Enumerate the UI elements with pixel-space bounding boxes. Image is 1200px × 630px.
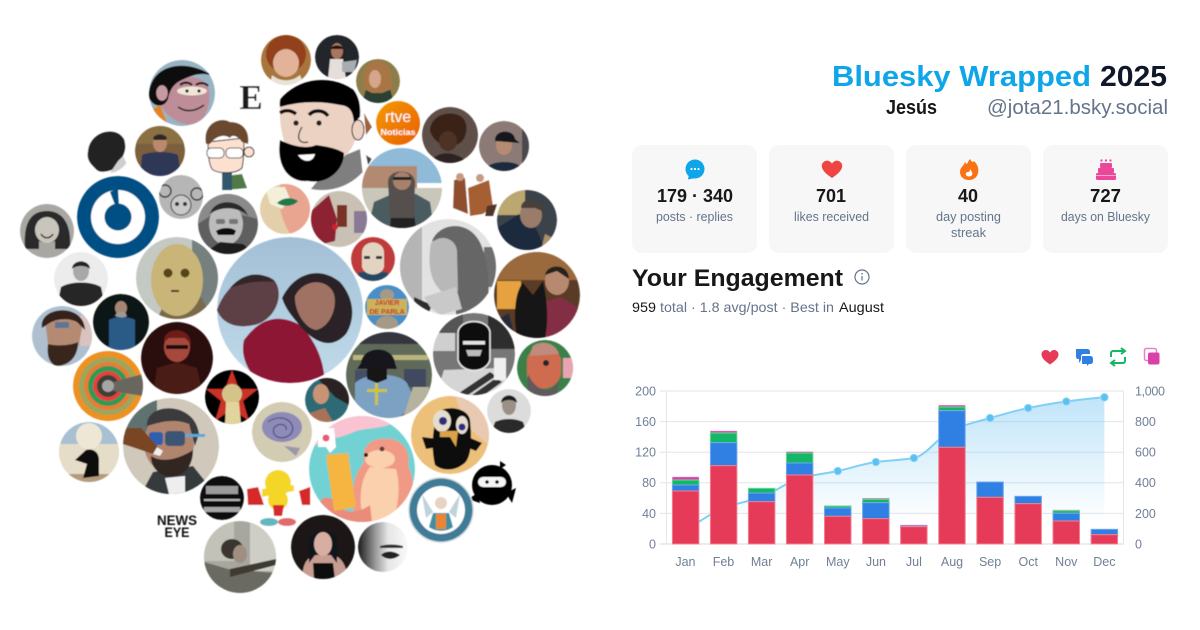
panel: likes received: 701 [816,186,846,206]
avatar: man with beer bottle [123,398,219,494]
engagement summary: August [839,299,884,315]
right axis labels: 0 [1135,538,1142,552]
avatar: news eye logo: NEWS [157,512,197,528]
panel: days on Bluesky: days on Bluesky [1061,210,1151,224]
month labels [675,555,1116,569]
avatar: dark hair profile [86,130,126,173]
left axis labels: 0 [649,538,656,552]
engagement summary: 959 [632,299,656,315]
panel: posts and replies: posts · replies [656,210,733,224]
avatar: eye closeup black and white [358,522,408,572]
month labels: Apr [790,555,809,569]
avatar: taj mahal photo [59,422,119,484]
avatar: ram drawing [159,175,203,219]
panel: day posting streak: 40 [958,186,978,206]
month labels: Dec [1093,555,1116,569]
month labels: Oct [1018,555,1038,569]
avatar: cartoon bearded man [267,79,377,190]
bar: November [1053,510,1080,544]
right axis labels: 200 [1135,507,1156,521]
month labels: May [826,555,850,569]
cumulative line [685,394,1108,530]
month labels: Aug [941,555,963,569]
right axis labels [1135,384,1165,552]
avatar: man with cat [494,252,580,338]
icon: reposts legend [1111,348,1125,366]
icon: birthday cake [1096,160,1116,180]
avatar: scribble plate [252,402,312,462]
avatar: otter with phone [309,416,415,522]
engagement summary [632,299,884,315]
avatar: tweety with boxing gloves [246,465,310,529]
avatar: blue ring logo [77,176,159,258]
avatar: man with cap [479,121,529,171]
avatar: curly hair smile drawing [20,204,74,258]
handle: @jota21.bsky.social [987,97,1168,119]
avatar: javier de parla logo [365,285,409,332]
avatar: rembrandt portrait [422,107,478,163]
avatar: woman with guitar [204,521,276,593]
bar: October [1015,496,1041,544]
avatar: man in black sweater [54,252,108,306]
avatar: woman with laptop [315,35,359,79]
icon: chat bubble [686,160,704,180]
panel: day posting streak [906,145,1031,253]
bar: August [939,405,965,544]
panel: days on Bluesky: 727 [1090,186,1121,206]
avatar: main profile photo [217,237,363,383]
engagement summary: total · 1.8 avg/post · Best in [660,299,834,315]
avatar: man looking down [497,190,557,250]
avatar: cartoon man with black hair [149,60,215,126]
avatar: E logo: E [239,78,263,117]
avatar: hand with red nail [311,191,367,247]
avatar: woman drawing with gun [305,378,349,422]
grid lines [660,391,1124,544]
bar: July [901,525,927,544]
left axis labels: 120 [635,446,656,460]
title: 2025 [1100,61,1167,93]
bar: February [710,431,737,544]
bar: June [863,498,889,544]
icon: quotes legend [1144,348,1160,364]
avatar: long hair man [356,59,400,103]
avatar: eye closeup [260,184,310,234]
panel: day posting streak: streak [951,226,987,240]
month labels: Nov [1055,555,1078,569]
panel: day posting streak: day posting [936,210,1001,224]
left axis labels: 160 [635,415,656,429]
panel: likes received: likes received [794,210,869,224]
panel: days on Bluesky [1043,145,1168,253]
avatar: drawn bald man [351,237,395,281]
chart legend [1042,348,1160,366]
avatar: ninja [468,461,516,505]
avatar: man in red light [141,322,213,394]
month labels: Mar [751,555,772,569]
panel: posts and replies: 179 · 340 [657,186,733,206]
bar: March [748,488,775,544]
right axis labels: 800 [1135,415,1156,429]
avatar: cartoon crow [411,396,489,474]
avatar: woman black and white [400,219,496,315]
avatar: engraving of bearded man [433,313,515,395]
avatar: blue medal logo [408,477,474,543]
avatar: news eye logo: EYE [164,524,190,540]
icon: flame [960,159,978,180]
avatar: fist on red star [205,370,259,424]
icon: info [855,270,869,284]
avatar cluster [20,35,580,593]
month labels: Feb [713,555,734,569]
avatar: groucho [198,194,258,254]
left axis labels [635,384,656,552]
avatar: rtve noticias logo [376,101,420,145]
chart: monthly engagement [635,384,1165,569]
icon: likes legend [1042,350,1058,364]
avatar: man in suit [487,389,531,433]
icon: replies legend [1076,349,1093,366]
bar: September [977,482,1003,544]
avatar: cartoon man with glasses [192,118,264,190]
month labels: Jun [866,555,886,569]
bar: May [824,506,851,544]
left axis labels: 40 [642,507,656,521]
heading: your engagement: Your Engagement [632,265,843,292]
avatar: concentric rings artwork [73,351,143,421]
title: Bluesky Wrapped [832,61,1091,93]
right axis labels: 1,000 [1135,384,1165,398]
avatar: javier de parla logo: DE PARLA [369,309,405,316]
month labels: Jan [675,555,696,569]
left axis labels: 200 [635,384,656,398]
avatar: man in blue shirt outdoors [135,126,185,176]
right axis labels: 600 [1135,446,1156,460]
avatar: rtve noticias logo: rtve [385,109,411,126]
avatar: goth girl [291,515,355,579]
avatar: bearded man with forehead label [32,306,92,366]
bar: April [786,452,813,544]
avatar: news eye logo [157,512,197,540]
bar: January [672,477,699,544]
avatar: child photo [261,35,311,85]
panel: likes received [769,145,894,253]
avatar: potato head [136,237,218,319]
avatar: rtve noticias logo: Noticias [380,127,416,137]
month labels: Jul [906,555,922,569]
avatar: E logo [230,75,272,117]
avatar: costume group [446,165,500,219]
month labels: Sep [979,555,1001,569]
cumulative area [685,397,1104,544]
avatar: seated man in blue shirt [93,294,149,350]
icon: heart [822,161,842,178]
bar: December [1091,529,1118,544]
avatar: javier de parla logo: JAVIER [375,300,399,307]
display name: Jesús [886,97,937,119]
left axis labels: 80 [642,476,656,490]
right axis labels: 400 [1135,476,1156,490]
avatar: bearded man with long hair [362,148,442,228]
avatar: dark album logo [200,476,244,520]
avatar: surprised bald man [517,340,573,396]
avatar: darth vader in office [346,332,432,418]
panel: posts and replies [632,145,757,253]
